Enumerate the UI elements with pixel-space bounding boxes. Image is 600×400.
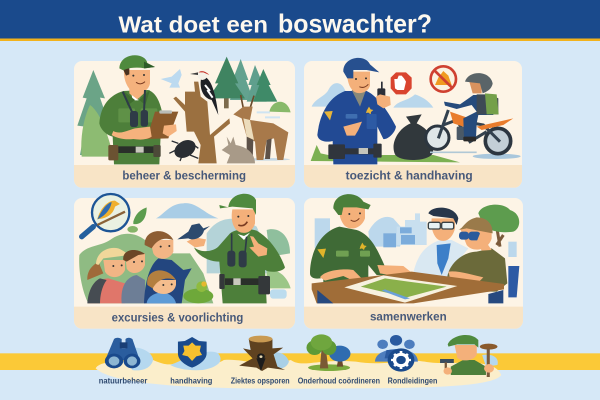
title: Wat doet een [118, 12, 268, 38]
wooden table [312, 272, 504, 303]
label: Rondleidingen: Rondleidingen [388, 376, 438, 385]
bottom band [0, 334, 600, 389]
deer [233, 95, 288, 160]
caption: samenwerken: samenwerken [370, 311, 447, 324]
background city and tree [315, 205, 519, 257]
label: Onderhoud coördineren: Onderhoud coördineren [298, 376, 380, 385]
ground [311, 145, 460, 162]
panel: beheer & bescherming [74, 55, 295, 188]
header banner [0, 0, 600, 41]
label: natuurbeheer: natuurbeheer [99, 376, 148, 385]
visitors group [87, 231, 192, 303]
label: Ziektes opsporen: Ziektes opsporen [231, 376, 290, 385]
child with sun hat [87, 248, 130, 303]
icon: police badge [170, 337, 221, 370]
beetle [169, 136, 199, 162]
child in grey [121, 250, 145, 303]
motorcycle [426, 110, 521, 159]
icon: tree stump [239, 336, 289, 371]
woodpecker [190, 70, 218, 115]
title: boswachter? [278, 8, 432, 38]
panel: toezicht & handhaving [304, 58, 522, 188]
officer [317, 58, 396, 164]
ranger [99, 55, 178, 164]
ranger guide [187, 194, 285, 303]
bushes [79, 203, 291, 303]
icon: trees [307, 334, 351, 371]
panel: excursies & voorlichting [74, 194, 295, 329]
caption: toezicht & handhaving: toezicht & handhaving [346, 170, 473, 183]
tree stump [173, 82, 230, 163]
frog [183, 281, 213, 303]
icon: binoculars [105, 338, 153, 370]
small bird on hand [177, 223, 210, 239]
ranger at table [310, 194, 413, 283]
no fire sign [431, 66, 456, 92]
young ranger with binoculars [447, 217, 507, 292]
magnifying glass with bird [82, 194, 147, 237]
trees background [77, 57, 291, 161]
caption: beheer & bescherming: beheer & bescherming [122, 170, 246, 183]
scientist [413, 208, 468, 279]
label: handhaving: handhaving [170, 376, 213, 385]
small child [147, 270, 176, 303]
trash bag [394, 114, 433, 160]
panel: samenwerken [304, 194, 523, 329]
tall child [144, 231, 192, 303]
rabbit [222, 137, 255, 163]
chair [508, 266, 519, 297]
bird silhouette [161, 69, 182, 88]
map [344, 275, 457, 303]
stop sign [391, 72, 412, 94]
clouds [312, 83, 433, 108]
icon: people with gear [375, 335, 418, 372]
icon: ranger with tools [440, 335, 498, 377]
caption: excursies & voorlichting: excursies & voorlichting [112, 311, 243, 324]
motorcycle rider [444, 73, 499, 141]
